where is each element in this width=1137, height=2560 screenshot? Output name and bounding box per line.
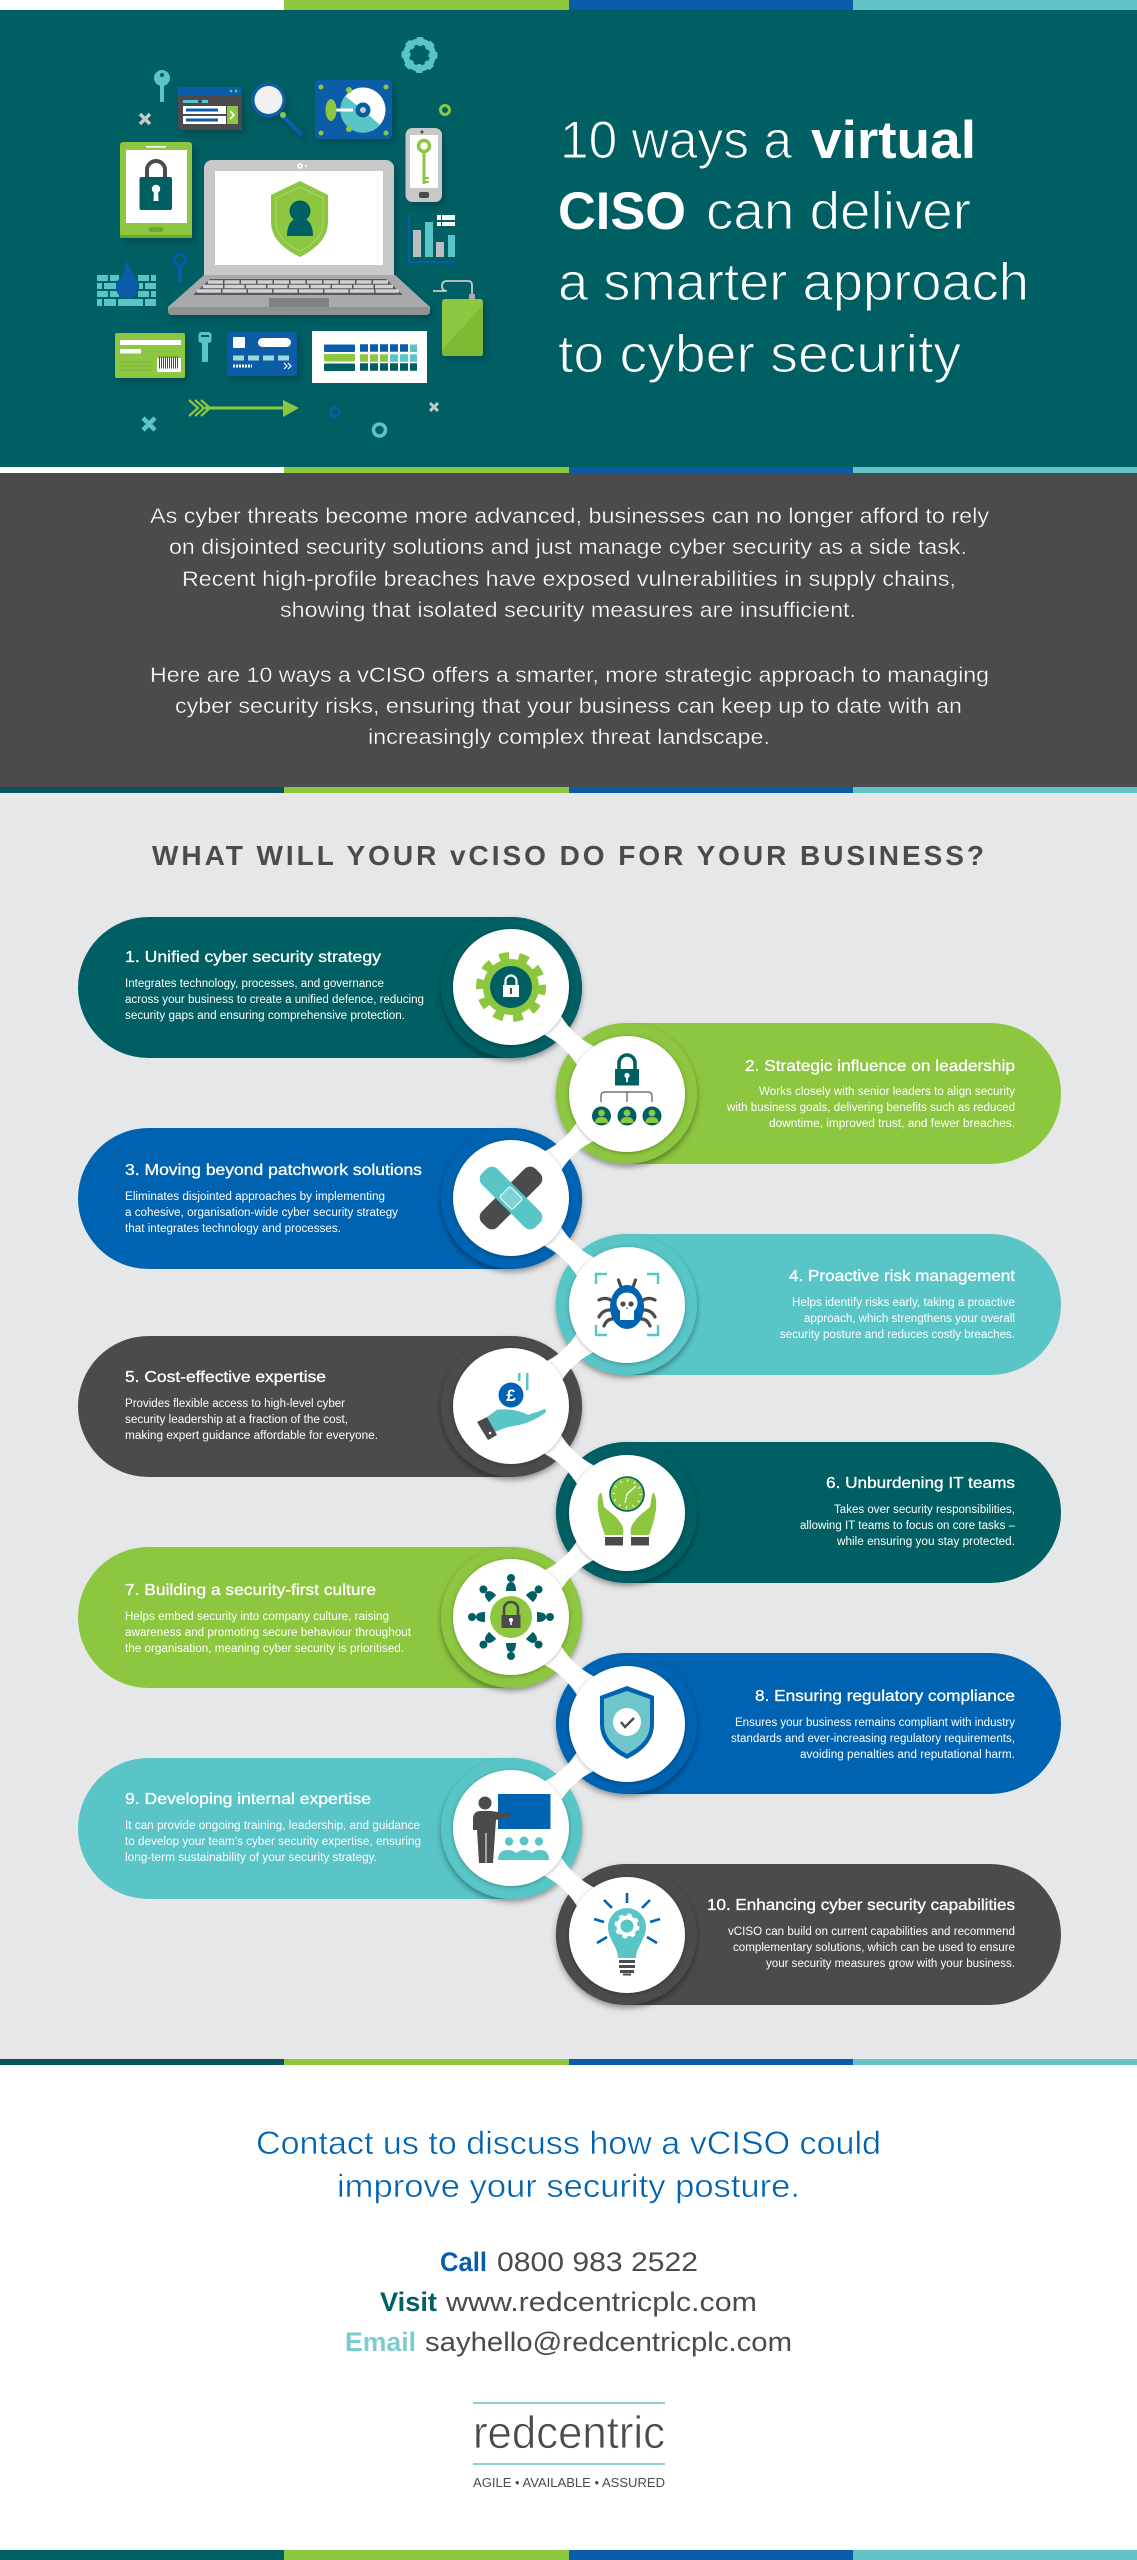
- description: [780, 1297, 1015, 1341]
- icon: grey cross: [140, 114, 150, 124]
- description: security gaps and ensuring comprehensive protection.: [125, 1010, 405, 1022]
- panel: 10 enhancing capabilities: 10. Enhancing cyber security capabilities: [707, 1897, 1015, 1914]
- description: that integrates technology and processes.: [125, 1223, 341, 1235]
- panel: 1 unified strategy: [78, 917, 582, 1058]
- description: a cohesive, organisation-wide cyber security strategy: [125, 1207, 398, 1219]
- description: Ensures your business remains compliant with industry: [735, 1717, 1015, 1729]
- icon: gear: [404, 39, 435, 71]
- title: CISO: [558, 182, 686, 241]
- description: Takes over security responsibilities,: [834, 1504, 1015, 1516]
- description: Integrates technology, processes, and governance: [125, 978, 384, 990]
- contact details: Visit: [380, 2287, 437, 2317]
- panel: 3 beyond patchwork: [78, 1128, 582, 1269]
- icon: pound coin above hand: [453, 1348, 569, 1464]
- intro paragraph two: cyber security risks, ensuring that your business can keep up to date with an: [175, 694, 962, 718]
- description: approach, which strengthens your overall: [804, 1313, 1015, 1325]
- panel: 1 unified strategy: 1. Unified cyber security strategy: [125, 949, 381, 966]
- colour strip under header: [0, 467, 1137, 473]
- description: [125, 1191, 398, 1235]
- icon: shield with tick: [569, 1666, 685, 1782]
- icon: teal ring: [374, 424, 386, 436]
- panel: 3 beyond patchwork: 3. Moving beyond patchwork solutions: [125, 1162, 422, 1179]
- description: with business goals, delivering benefits such as reduced: [726, 1102, 1015, 1114]
- panel: 7 security-first culture: [78, 1547, 582, 1688]
- icon: blue card: [227, 332, 297, 376]
- icon: teal cross: [143, 418, 155, 430]
- logo: redcentric: [473, 2402, 665, 2490]
- icon: light bulb with gear: [569, 1877, 685, 1993]
- description: [125, 1611, 412, 1655]
- description: [125, 1820, 421, 1864]
- colour strip below services: [0, 2059, 1137, 2065]
- description: Provides flexible access to high-level cyber: [125, 1398, 345, 1410]
- description: It can provide ongoing training, leadership, and guidance: [125, 1820, 420, 1832]
- icon: user shield: [271, 181, 328, 257]
- icon: blue key: [174, 254, 186, 282]
- icon: presenter with audience: [453, 1770, 569, 1886]
- panel: grey services section background: [0, 793, 1137, 2059]
- contact heading: improve your security posture.: [337, 2168, 800, 2204]
- description: [731, 1717, 1015, 1761]
- description: Helps identify risks early, taking a proactive: [792, 1297, 1015, 1309]
- description: [125, 978, 424, 1022]
- description: downtime, improved trust, and fewer breaches.: [769, 1118, 1015, 1130]
- description: across your business to create a unified defence, reducing: [125, 994, 424, 1006]
- icon: skull bug in scanner: [569, 1247, 685, 1363]
- icon: login window: [178, 87, 242, 130]
- hero illustration: [97, 39, 483, 436]
- description: while ensuring you stay protected.: [836, 1536, 1015, 1548]
- icon: small grey cross: [430, 403, 438, 411]
- panel: 2 strategic influence: [556, 1023, 1061, 1164]
- title: to cyber security: [558, 325, 962, 384]
- intro paragraph one: [150, 504, 989, 622]
- logo: redcentric: redcentric: [473, 2407, 665, 2458]
- intro paragraph one: showing that isolated security measures are insufficient.: [280, 598, 856, 622]
- panel: 6 unburdening IT: 6. Unburdening IT teams: [826, 1475, 1015, 1492]
- description: vCISO can build on current capabilities and recommend: [728, 1926, 1015, 1938]
- contact heading: Contact us to discuss how a vCISO could: [256, 2125, 881, 2161]
- icon: external drive: [433, 281, 483, 356]
- contact details: 0800 983 2522: [497, 2247, 698, 2277]
- description: security posture and reduces costly breaches.: [780, 1329, 1015, 1341]
- icon: clock held by hands: [569, 1455, 685, 1571]
- description: Works closely with senior leaders to align security: [759, 1086, 1015, 1098]
- contact details: [345, 2247, 792, 2357]
- intro paragraph one: on disjointed security solutions and just manage cyber security as a side task.: [169, 535, 967, 559]
- description: Eliminates disjointed approaches by implementing: [125, 1191, 385, 1203]
- description: standards and ever-increasing regulatory requirements,: [731, 1733, 1015, 1745]
- panel: 5 cost-effective: 5. Cost-effective expertise: [125, 1369, 326, 1386]
- description: [726, 1086, 1015, 1130]
- panel: 4 proactive risk: 4. Proactive risk management: [789, 1268, 1016, 1285]
- panel: 8 regulatory compliance: [556, 1653, 1061, 1794]
- icon: teal key: [154, 70, 170, 102]
- description: [800, 1504, 1016, 1548]
- icon: crossed bandages: [453, 1140, 569, 1256]
- top colour strip: [0, 0, 1137, 10]
- description: avoiding penalties and reputational harm.: [800, 1749, 1015, 1761]
- icon: phone with key: [406, 128, 442, 202]
- panel: 7 security-first culture: 7. Building a security-first culture: [125, 1582, 376, 1599]
- icon: padlock with team hierarchy: [569, 1036, 685, 1152]
- intro paragraph two: Here are 10 ways a vCISO offers a smarter, more strategic approach to managing: [150, 663, 989, 687]
- icon: bar chart: [409, 215, 455, 262]
- panel: introduction: [0, 467, 1137, 788]
- icon: white data panel: [312, 331, 427, 383]
- title: 10 ways a: [560, 111, 792, 170]
- description: to develop your team’s cyber security expertise, ensuring: [125, 1836, 421, 1848]
- icon: laptop: [168, 160, 430, 315]
- description: long-term sustainability of your security strategy.: [125, 1852, 377, 1864]
- panel: 10 enhancing capabilities: [556, 1864, 1061, 2005]
- panel: 4 proactive risk: [556, 1234, 1061, 1375]
- contact details: www.redcentricplc.com: [445, 2287, 757, 2317]
- description: complementary solutions, which can be used to ensure: [733, 1942, 1015, 1954]
- intro paragraph two: increasingly complex threat landscape.: [368, 725, 770, 749]
- description: [728, 1926, 1015, 1970]
- title: [558, 111, 1029, 384]
- colour strip above services: [0, 787, 1137, 793]
- description: the organisation, meaning cyber security is prioritised.: [125, 1643, 404, 1655]
- icon: green card: [115, 333, 185, 378]
- icon: gear padlock: [453, 929, 569, 1045]
- icon: tablet with padlock: [120, 142, 192, 238]
- panel: 9 internal expertise: 9. Developing internal expertise: [125, 1791, 371, 1808]
- intro paragraph one: Recent high-profile breaches have exposed vulnerabilities in supply chains,: [182, 567, 956, 591]
- bottom colour strip: [0, 2550, 1137, 2560]
- description: your security measures grow with your business.: [766, 1958, 1015, 1970]
- icon: blue ring: [330, 408, 340, 416]
- contact heading: [256, 2125, 881, 2204]
- contact details: Email: [345, 2327, 416, 2357]
- logo: redcentric: AGILE • AVAILABLE • ASSURED: [473, 2476, 665, 2490]
- icon: small teal key: [198, 332, 212, 362]
- title: a smarter approach: [558, 253, 1029, 312]
- description: Helps embed security into company culture, raising: [125, 1611, 389, 1623]
- panel: 2 strategic influence: 2. Strategic influence on leadership: [745, 1058, 1015, 1075]
- contact details: Call: [440, 2247, 487, 2277]
- arrow: [189, 400, 299, 417]
- title: can deliver: [706, 182, 971, 241]
- title: virtual: [811, 111, 976, 170]
- description: security leadership at a fraction of the cost,: [125, 1414, 348, 1426]
- icon: padlock surrounded by people: [453, 1559, 569, 1675]
- description: awareness and promoting secure behaviour throughout: [125, 1627, 412, 1639]
- intro paragraph one: As cyber threats become more advanced, businesses can no longer afford to rely: [150, 504, 989, 528]
- icon: magnifier: [251, 82, 302, 135]
- panel: 9 internal expertise: [78, 1758, 582, 1899]
- icon: hard drive: [315, 80, 392, 139]
- panel: 6 unburdening IT: [556, 1442, 1061, 1583]
- description: [125, 1398, 378, 1442]
- description: allowing IT teams to focus on core tasks –: [800, 1520, 1016, 1532]
- header panel: [0, 0, 1137, 468]
- intro paragraph two: [150, 663, 989, 749]
- contact details: sayhello@redcentricplc.com: [425, 2327, 792, 2357]
- icon: firewall: [97, 260, 156, 306]
- description: making expert guidance affordable for everyone.: [125, 1430, 378, 1442]
- panel: 5 cost-effective: [78, 1336, 582, 1477]
- icon: green ring: [440, 106, 450, 114]
- connectors between circles: [540, 1012, 598, 1910]
- heading: WHAT WILL YOUR vCISO DO FOR YOUR BUSINESS?: [152, 840, 984, 871]
- panel: 8 regulatory compliance: 8. Ensuring regulatory compliance: [755, 1688, 1015, 1705]
- icon: pound coin above hand: £: [506, 1386, 516, 1405]
